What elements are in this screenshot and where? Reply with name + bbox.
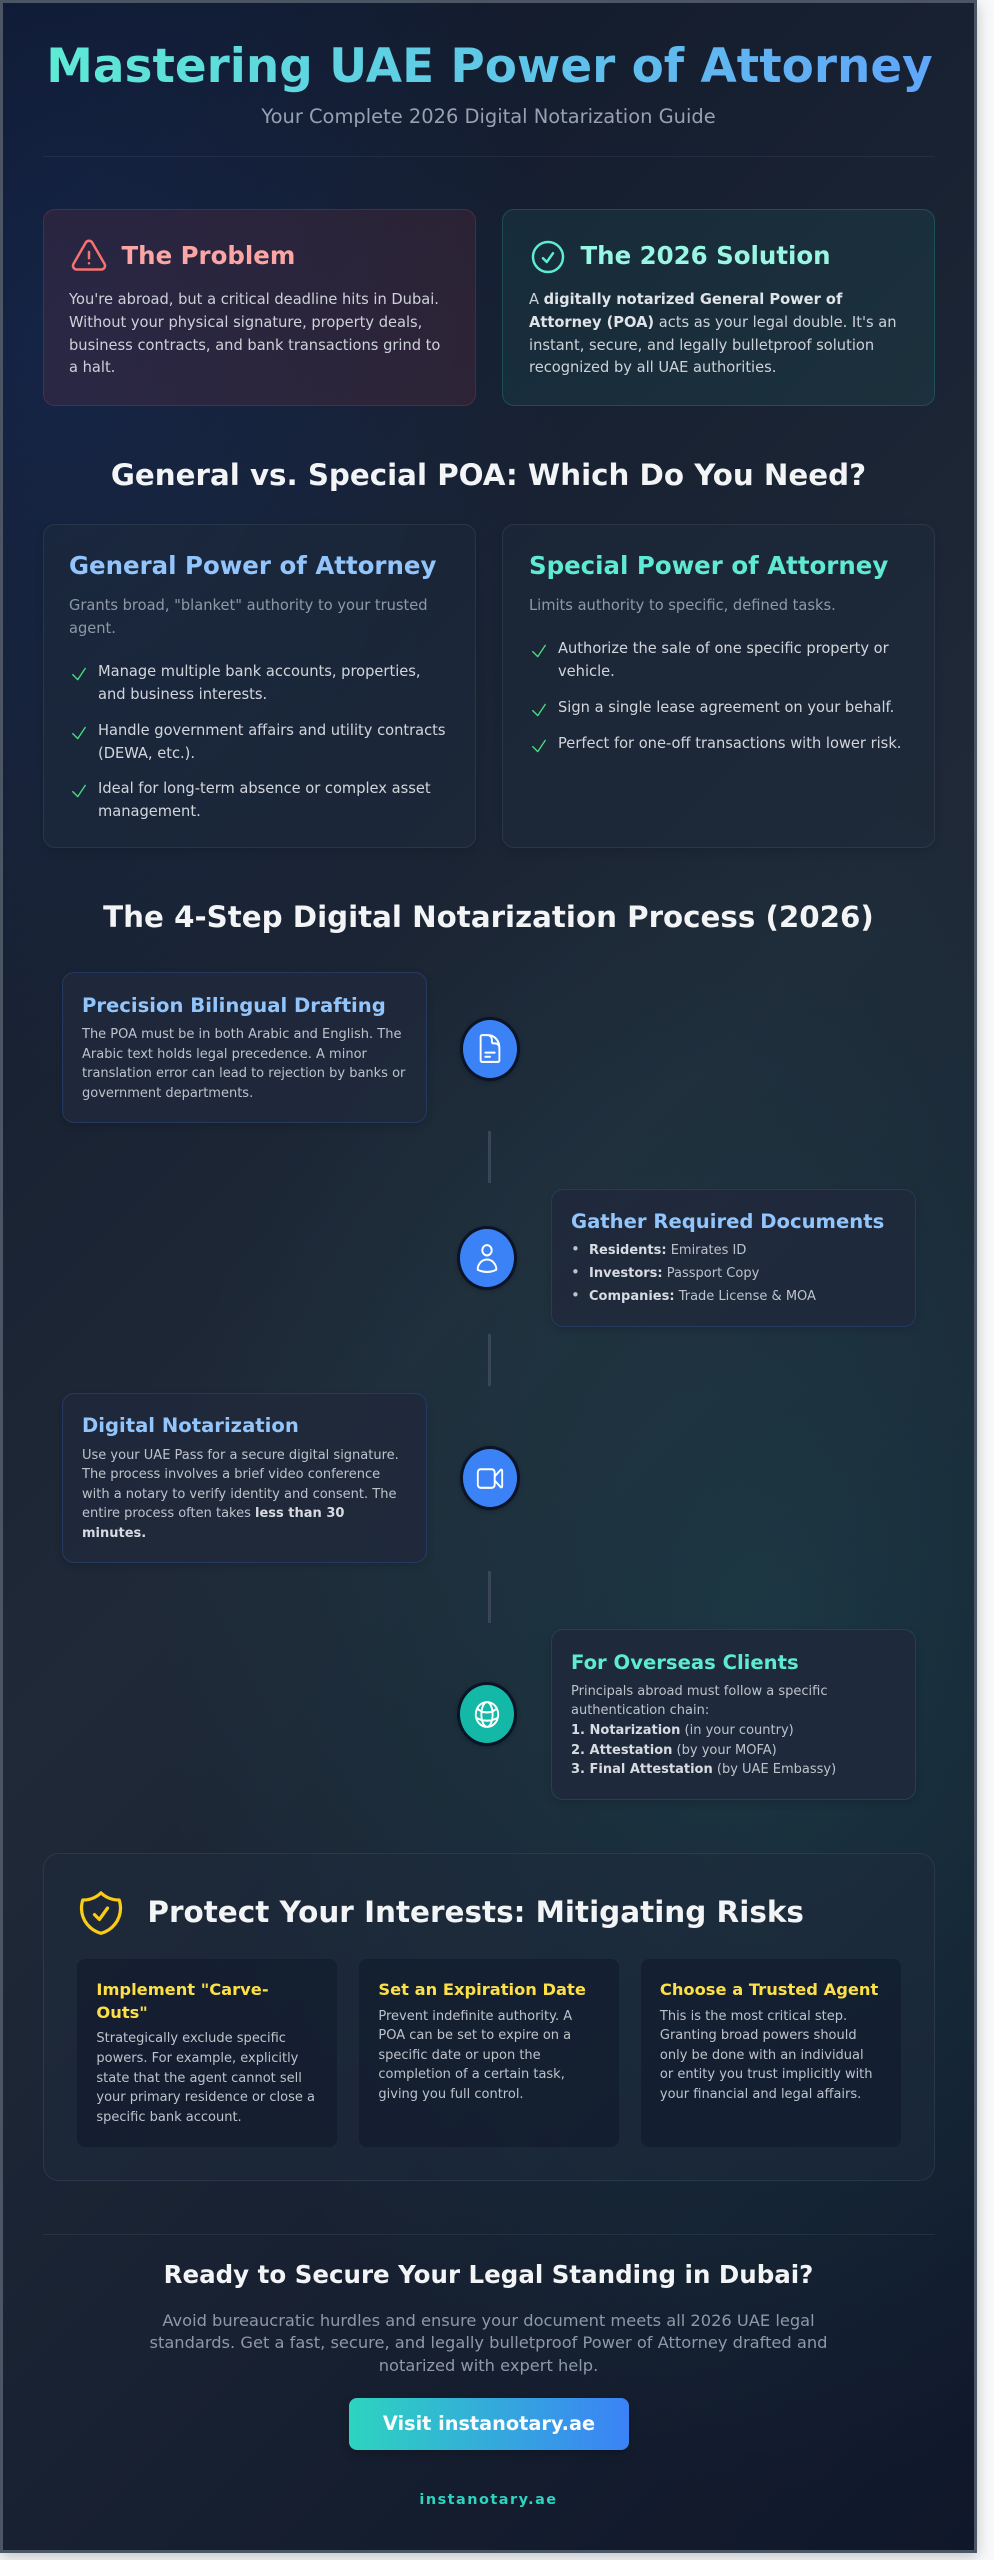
step 2 document list: Residents: Emirates ID — [589, 1243, 746, 1258]
step 4 title: For Overseas Clients — [571, 1651, 799, 1674]
text: special poa summary: Limits authority to specific, defined tasks. — [529, 597, 836, 614]
panel: protect your interests — [43, 1853, 935, 2181]
call to action section — [43, 2234, 935, 2464]
text: solution description: instant, secure, and legally bulletproof solution — [529, 337, 874, 354]
panel: the problem — [43, 209, 476, 406]
carve-outs text: specific bank account. — [96, 2110, 242, 2125]
trusted agent text: This is the most critical step. — [660, 2009, 847, 2024]
list item: sale of property: Authorize the sale of one specific property or — [558, 640, 889, 657]
step 2 card: required documents — [551, 1189, 916, 1327]
list item: government affairs: Handle government affairs and utility contracts — [98, 722, 446, 738]
step 2 document list: • — [571, 1240, 580, 1258]
panel: special power of attorney — [502, 524, 935, 848]
expiration text: giving you full control. — [378, 2087, 524, 2102]
text: problem description: Without your physical signature, property deals, — [69, 314, 422, 331]
cta heading: Ready to Secure Your Legal Standing in Dubai? — [164, 2260, 813, 2289]
step 2 document list: Companies: Trade License & MOA — [589, 1289, 816, 1304]
carve-outs text — [96, 2031, 315, 2125]
cta text: Avoid bureaucratic hurdles and ensure your document meets all 2026 UAE legal — [162, 2310, 815, 2330]
step 4 authentication chain: Principals abroad must follow a specific — [571, 1684, 827, 1699]
icon: document — [460, 1016, 520, 1080]
list item: government affairs: (DEWA, etc.). — [98, 744, 195, 762]
expiration title: Set an Expiration Date — [378, 1980, 586, 1999]
step 3 description: minutes. — [82, 1526, 146, 1541]
step 4 authentication chain — [571, 1684, 836, 1777]
heading: 4-step process: The 4-Step Digital Notarization Process (2026) — [103, 900, 874, 934]
text: problem description — [69, 291, 440, 376]
icon: person — [457, 1226, 517, 1290]
text: problem description: You're abroad, but a critical deadline hits in Dubai. — [69, 291, 439, 308]
icon: shield check — [80, 1891, 122, 1935]
text: general poa summary — [69, 597, 428, 637]
text: solution description: recognized by all UAE authorities. — [529, 359, 776, 376]
list item: sale of property — [532, 640, 889, 680]
carve-outs title: Implement "Carve- — [96, 1980, 269, 1999]
step 2 title: Gather Required Documents — [571, 1210, 884, 1233]
step 1 description: The POA must be in both Arabic and English. The — [82, 1027, 401, 1042]
cta button: Visit instanotary.ae — [383, 2412, 595, 2435]
list item: long-term absence — [72, 780, 431, 820]
step 3 description: The process involves a brief video conference — [82, 1467, 380, 1482]
carve-outs title: Outs" — [96, 2003, 148, 2022]
trusted agent text: or entity you trust implicitly with — [660, 2067, 873, 2082]
trusted agent text: Granting broad powers should — [660, 2028, 857, 2043]
heading: general vs special: General vs. Special POA: Which Do You Need? — [111, 458, 866, 492]
heading: the problem: The Problem — [122, 241, 295, 270]
text: general poa summary: Grants broad, "blanket" authority to your trusted — [69, 597, 428, 614]
text: solution description: Attorney (POA) acts as your legal double. It's an — [529, 314, 897, 331]
icon: warning triangle — [72, 240, 106, 271]
step 4 authentication chain: authentication chain: — [571, 1703, 709, 1718]
icon: video camera — [460, 1446, 520, 1510]
list item: long-term absence: management. — [98, 803, 201, 820]
text: problem description: business contracts, and bank transactions grind to — [69, 337, 440, 354]
step 3 card: digital notarization — [62, 1393, 427, 1563]
step 4 authentication chain: 3. Final Attestation (by UAE Embassy) — [571, 1762, 836, 1777]
step 3 description: Use your UAE Pass for a secure digital signature. — [82, 1448, 399, 1462]
step 4 authentication chain: 2. Attestation (by your MOFA) — [571, 1743, 777, 1758]
step 3 title: Digital Notarization — [82, 1414, 299, 1437]
connector 1 — [488, 1131, 491, 1183]
panel: general power of attorney — [43, 524, 476, 848]
trusted agent text: your financial and legal affairs. — [660, 2087, 861, 2102]
list item: government affairs — [72, 722, 446, 762]
list item: bank accounts: Manage multiple bank accounts, properties, — [98, 663, 421, 680]
trusted agent title: Choose a Trusted Agent — [660, 1980, 878, 1999]
list item: one-off transactions: Perfect for one-off transactions with lower risk. — [558, 734, 901, 752]
expiration text — [378, 2009, 572, 2102]
step 1 description: government departments. — [82, 1086, 253, 1101]
heading: general poa: General Power of Attorney — [69, 550, 436, 580]
icon: globe — [457, 1682, 517, 1746]
icon: check circle — [532, 240, 564, 274]
trusted agent text — [660, 2009, 873, 2102]
expiration text: Prevent indefinite authority. A — [378, 2009, 572, 2024]
step 3 description — [82, 1448, 399, 1541]
risk card: expiration date — [359, 1959, 619, 2147]
heading: special poa: Special Power of Attorney — [529, 550, 888, 580]
expiration text: POA can be set to expire on a — [378, 2028, 571, 2043]
step 2 document list — [571, 1240, 816, 1304]
risk card: carve-outs — [77, 1959, 337, 2147]
risk card: trusted agent — [640, 1959, 900, 2147]
text: solution description — [529, 291, 897, 376]
cta button — [349, 2398, 629, 2450]
step 4 card: overseas clients — [551, 1629, 916, 1800]
title: Mastering UAE Power of Attorney — [46, 39, 933, 94]
list item: long-term absence: Ideal for long-term absence or complex asset — [98, 780, 431, 797]
step 1 description: translation error can lead to rejection by banks or — [82, 1066, 405, 1081]
text: solution description: A digitally notarized General Power of — [529, 291, 842, 308]
step 1 description — [82, 1027, 406, 1101]
list item: lease agreement: Sign a single lease agreement on your behalf. — [558, 699, 894, 716]
step 2 document list: Investors: Passport Copy — [589, 1266, 759, 1281]
list item: sale of property: vehicle. — [558, 663, 615, 680]
cta text: standards. Get a fast, secure, and legally bulletproof Power of Attorney drafted and — [149, 2333, 828, 2352]
carve-outs text: Strategically exclude specific — [96, 2031, 286, 2046]
text: general poa summary: agent. — [69, 620, 116, 637]
step 1 description: Arabic text holds legal precedence. A minor — [82, 1047, 367, 1062]
connector 2 — [488, 1334, 491, 1386]
subtitle: Your Complete 2026 Digital Notarization Guide — [261, 104, 716, 128]
step 4 authentication chain: 1. Notarization (in your country) — [571, 1723, 794, 1738]
list item: bank accounts: and business interests. — [98, 686, 267, 703]
step 2 document list: • — [571, 1286, 580, 1304]
carve-outs text: your primary residence or close a — [96, 2090, 315, 2105]
text: problem description: a halt. — [69, 359, 115, 376]
step 1 title: Precision Bilingual Drafting — [82, 994, 386, 1017]
heading: mitigating risks: Protect Your Interests: Mitigating Risks — [147, 1895, 804, 1929]
cta text — [149, 2310, 828, 2375]
carve-outs title — [96, 1980, 269, 2022]
list item: bank accounts — [72, 663, 421, 703]
carve-outs text: state that the agent cannot sell — [96, 2071, 302, 2086]
expiration text: specific date or upon the — [378, 2048, 541, 2063]
panel: the 2026 solution — [502, 209, 935, 406]
cta text: notarized with expert help. — [379, 2356, 598, 2375]
carve-outs text: powers. For example, explicitly — [96, 2051, 298, 2066]
heading: the 2026 solution: The 2026 Solution — [580, 241, 831, 270]
step 1 card: bilingual drafting — [62, 972, 427, 1123]
header divider — [43, 156, 935, 157]
step 3 description: with a notary to verify identity and consent. The — [82, 1487, 396, 1502]
step 2 document list: • — [571, 1263, 580, 1281]
footer url: instanotary.ae — [419, 2492, 558, 2508]
expiration text: completion of a certain task, — [378, 2067, 565, 2082]
connector 3 — [488, 1571, 491, 1623]
trusted agent text: only be done with an individual — [660, 2048, 864, 2063]
step 3 description: entire process often takes less than 30 — [82, 1506, 344, 1521]
